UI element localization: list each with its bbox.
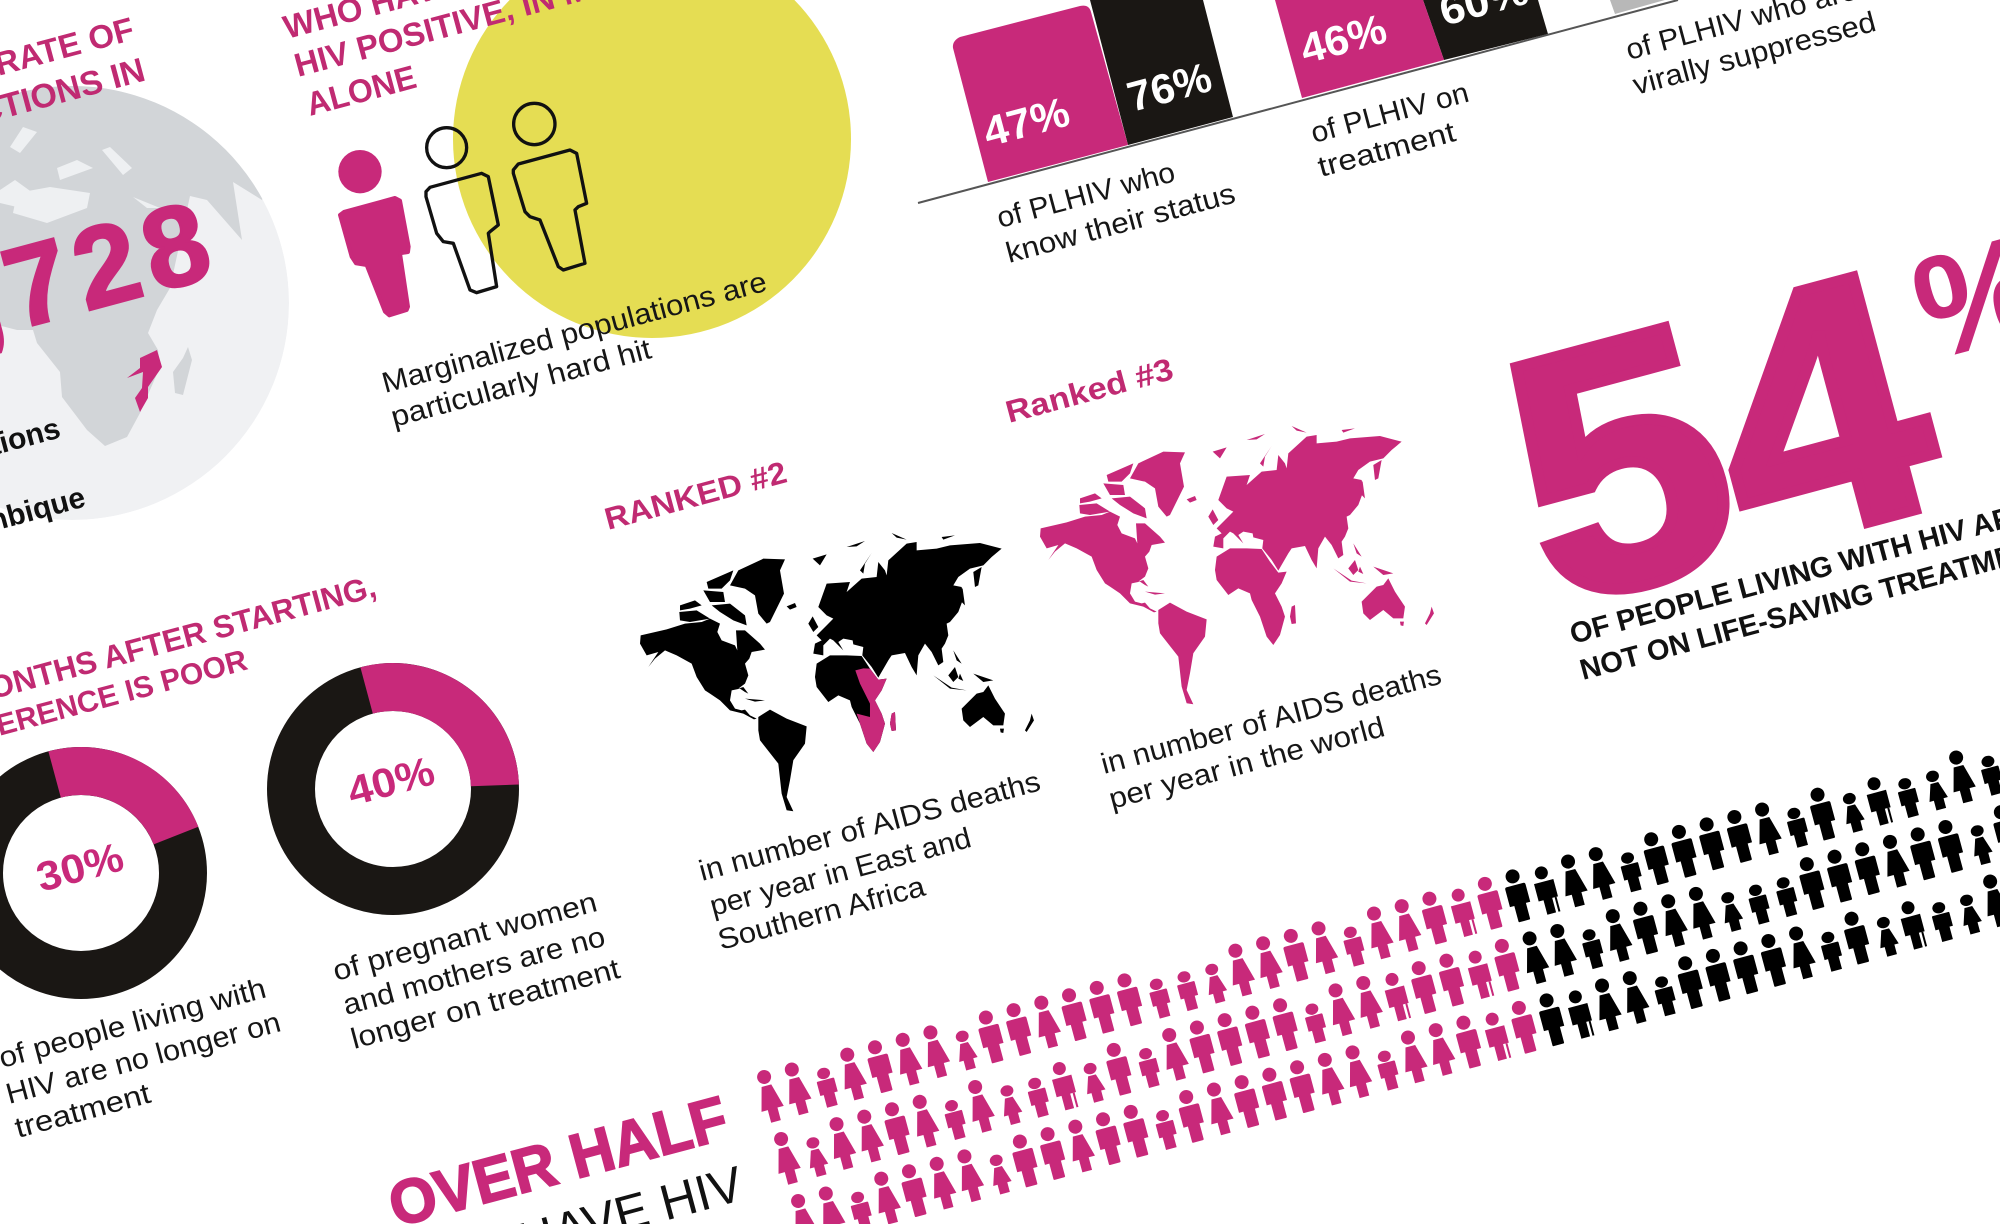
panel: treatment cascade bar chart <box>918 0 1879 270</box>
icon: pink person <box>338 150 409 315</box>
icon: outline person two <box>513 103 587 270</box>
black figures row three <box>1535 865 2000 1048</box>
caption: people living with HIV: of people living with <box>0 973 269 1075</box>
caption: marginalized populations: particularly hard hit <box>388 333 655 434</box>
yellow circle <box>453 0 851 338</box>
globe <box>0 60 300 520</box>
bar captions: virally suppressed <box>1630 6 1879 102</box>
donut value 40 percent: 40% <box>342 747 439 815</box>
bar: 76 percent known status <box>1053 0 1233 145</box>
caption: marginalized populations: Marginalized populations are <box>379 266 770 400</box>
caption: pregnant women: longer on treatment <box>348 953 623 1056</box>
pictogram row two <box>768 803 2000 1186</box>
caption: pregnant women <box>330 886 623 1056</box>
caption: in the world: per year in the world <box>1106 711 1388 816</box>
bar captions: of PLHIV who <box>994 156 1179 235</box>
panel: adherence donuts <box>0 568 623 1145</box>
map: black world with East and Southern Africa <box>640 533 1034 811</box>
bar: grey virally suppressed <box>1610 0 1665 14</box>
heading: who have HIV: ALONE <box>302 58 420 123</box>
panel: ranked 2 map <box>601 455 1044 957</box>
donut chart: 30 percent <box>0 771 183 975</box>
heading: who have HIV <box>279 0 789 123</box>
panel: over half pictogram <box>382 741 2000 1224</box>
caption: people living with HIV: HIV are no longer on <box>3 1007 284 1111</box>
donut value 30 percent: 30% <box>31 833 128 901</box>
baseline axis <box>918 0 1678 203</box>
bar values: 47% <box>978 88 1074 156</box>
bar values <box>978 0 1533 156</box>
bar: 46 percent on treatment <box>1275 0 1444 98</box>
bar captions <box>994 0 1879 270</box>
pink figures row one <box>751 874 1507 1124</box>
pink figures row three <box>785 998 1541 1224</box>
panel: HIV rate globe <box>0 17 289 528</box>
icon: Mozambique highlight <box>127 350 162 412</box>
caption: East and Southern Africa: Southern Africa <box>715 870 929 957</box>
heading: adherence <box>0 568 380 809</box>
heading: ranked 3: Ranked #3 <box>1002 351 1177 430</box>
caption: East and Southern Africa <box>696 766 1044 957</box>
bar: 60 percent on treatment <box>1423 0 1548 60</box>
globe caption <box>0 412 89 569</box>
pink figures row two <box>768 936 1524 1186</box>
panel: 54 percent callout <box>1470 195 2000 687</box>
bar captions: treatment <box>1315 116 1459 184</box>
bar values: 46% <box>1295 5 1391 73</box>
big number 54: 54 <box>1470 195 1972 679</box>
pictogram row one <box>751 741 2000 1124</box>
map: pink world <box>1040 426 1434 704</box>
caption: people living with HIV <box>0 973 284 1145</box>
caption: pregnant women: and mothers are no <box>340 921 609 1022</box>
caption: East and Southern Africa: per year in East and <box>707 822 975 923</box>
bar captions: of PLHIV on <box>1308 77 1472 150</box>
pictogram row three <box>785 865 2000 1224</box>
panel: ranked 3 map <box>1002 351 1445 816</box>
panel: women who have HIV <box>279 0 851 434</box>
icon: outline person one <box>426 128 498 293</box>
black figures row two <box>1517 803 2000 986</box>
bar values: 76% <box>1122 53 1216 121</box>
heading: ranked 2: RANKED #2 <box>601 455 790 537</box>
caption: people living with HIV: treatment <box>12 1078 154 1145</box>
bar: 47 percent known status <box>953 6 1128 182</box>
caption: pregnant women: of pregnant women <box>330 886 601 988</box>
black figures row one <box>1501 741 2000 924</box>
caption: East and Southern Africa: in number of AIDS deaths <box>696 766 1044 888</box>
caption: in the world: in number of AIDS deaths <box>1098 659 1445 781</box>
donut chart: 40 percent <box>291 687 495 891</box>
bar captions: know their status <box>1003 178 1239 270</box>
